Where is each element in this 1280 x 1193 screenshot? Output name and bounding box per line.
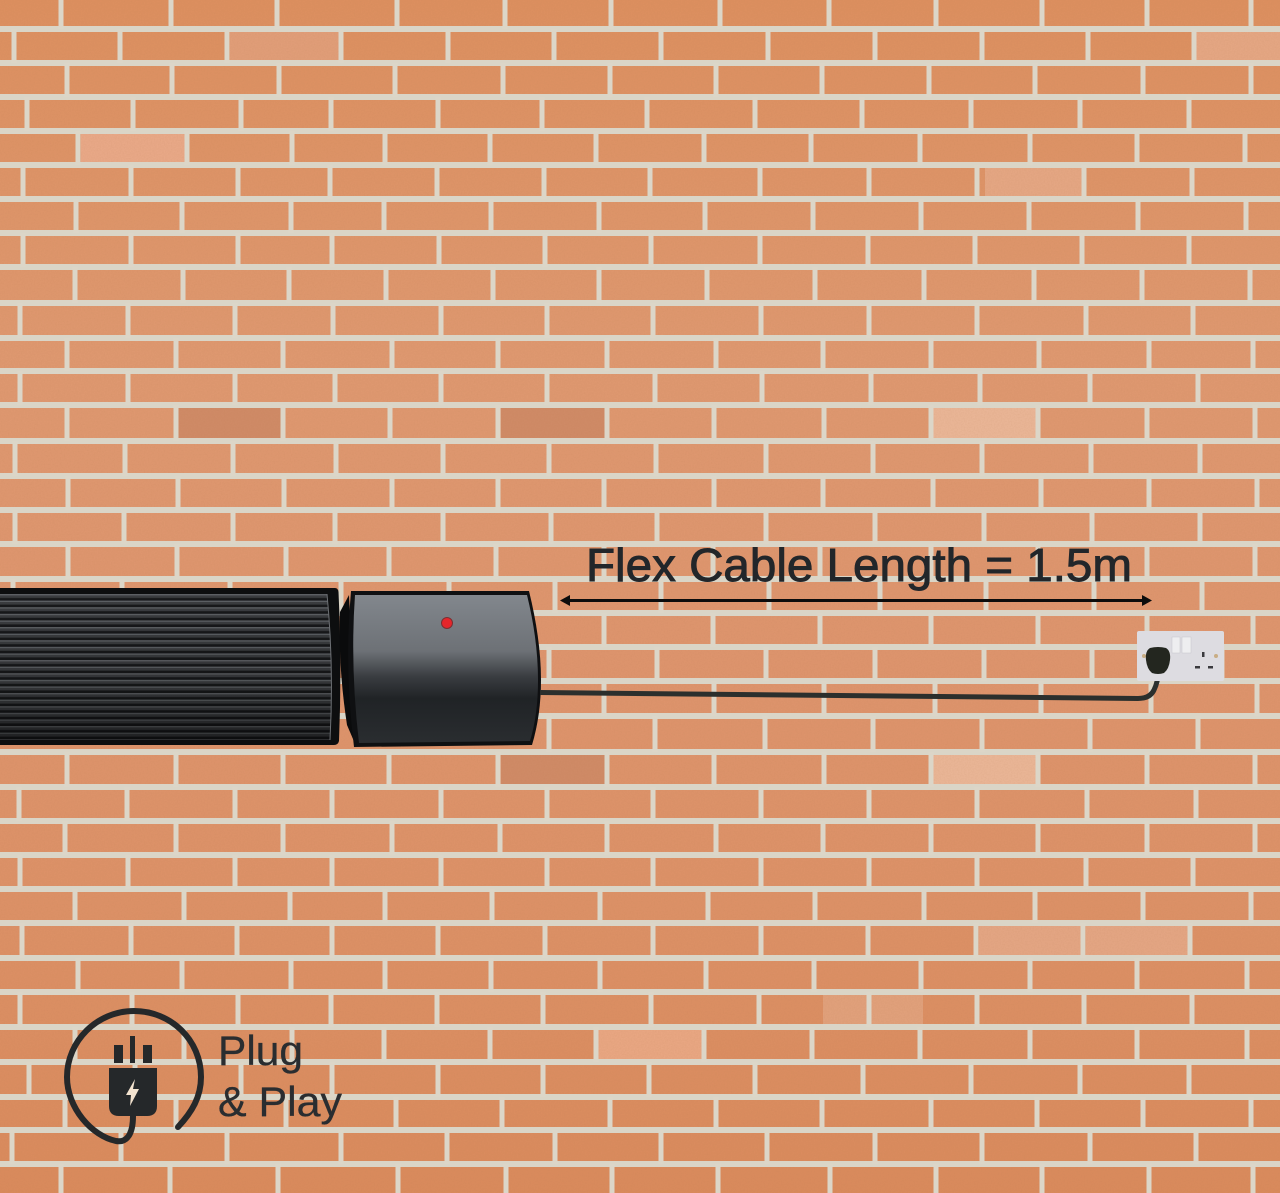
- control box body: [348, 591, 541, 747]
- wall socket: [1137, 631, 1224, 681]
- icon: plug and play: [67, 1011, 201, 1141]
- heater panel: [0, 588, 340, 745]
- flex cable: [540, 672, 1158, 698]
- double-headed arrow: [560, 595, 1152, 606]
- socket plate: [1137, 631, 1224, 681]
- connector bracket: [340, 595, 356, 746]
- measurement label: Flex Cable Length = 1.5m: [586, 539, 1132, 591]
- switches: [1172, 637, 1180, 653]
- red LED indicator: [442, 618, 452, 628]
- plug and play label: Plug: [218, 1027, 303, 1074]
- control box with connector: [340, 591, 541, 747]
- plug: [1146, 647, 1170, 674]
- plug and play label: & Play: [218, 1078, 342, 1125]
- screws and socket holes: [1142, 652, 1218, 668]
- plug and play label: [218, 1027, 342, 1125]
